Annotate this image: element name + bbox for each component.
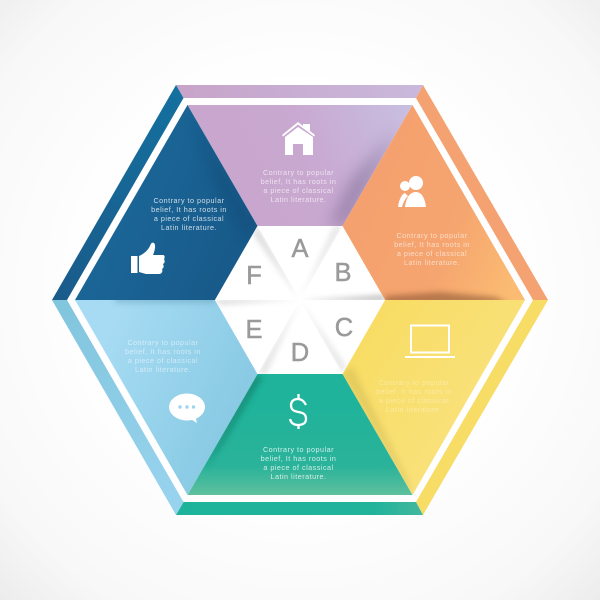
- text: panel E: Latin literature.: [135, 365, 191, 374]
- text: panel B: [394, 231, 470, 267]
- text: panel E: Contrary to popular: [127, 338, 199, 347]
- text: panel D: Latin literature.: [270, 472, 327, 481]
- icon: laptop: [405, 326, 455, 357]
- text: panel E: a piece of classical: [128, 356, 198, 365]
- panel B: orange: [342, 105, 525, 304]
- text: panel A: [261, 168, 336, 204]
- outer band: dark blue: [52, 85, 184, 300]
- panel F: dark blue: [75, 105, 258, 300]
- text: panel E: belief, It has roots in: [125, 347, 201, 356]
- letter C: C: [335, 314, 353, 342]
- letter B: B: [334, 259, 352, 287]
- text: panel C: a piece of classical: [379, 396, 449, 405]
- icon: house: [282, 122, 315, 155]
- icon: speech bubble: [169, 394, 205, 423]
- text: panel F: [151, 196, 227, 232]
- outer band: yellow: [416, 300, 548, 515]
- icon: dollar: [290, 394, 306, 429]
- letter E: E: [245, 316, 263, 344]
- icon: people: [398, 176, 426, 207]
- text: panel A: a piece of classical: [263, 186, 334, 195]
- text: panel D: [261, 445, 336, 481]
- text: panel C: Contrary to popular: [378, 378, 450, 387]
- letter D: D: [291, 339, 309, 367]
- center hexagon with letters: [215, 226, 385, 374]
- text: panel F: belief, It has roots in: [151, 205, 227, 214]
- text: panel A: Contrary to popular: [263, 168, 334, 177]
- letter A: A: [291, 235, 309, 263]
- hexagon infographic: [52, 85, 548, 515]
- panel E: light blue: [75, 296, 258, 495]
- icon: thumbs up: [131, 243, 165, 274]
- text: panel C: Latin literature.: [386, 405, 442, 414]
- panel D: teal: [188, 374, 412, 495]
- text: panel C: belief, It has roots in: [376, 387, 452, 396]
- text: panel B: belief, It has roots in: [394, 240, 470, 249]
- text: panel A: Latin literature.: [270, 195, 327, 204]
- text: panel B: Contrary to popular: [396, 231, 468, 240]
- text: panel B: Latin literature.: [404, 258, 460, 267]
- text: panel A: belief, It has roots in: [261, 177, 336, 186]
- text: panel D: a piece of classical: [263, 463, 334, 472]
- outer band: teal: [176, 502, 423, 515]
- letter F: F: [246, 262, 262, 290]
- outer band: light blue: [52, 300, 184, 515]
- text: panel D: Contrary to popular: [263, 445, 334, 454]
- panel A: purple: [188, 105, 412, 226]
- text: panel D: belief, It has roots in: [261, 454, 336, 463]
- outer band: purple: [176, 85, 423, 98]
- panel C: yellow: [342, 300, 525, 495]
- text: panel C: [376, 378, 452, 414]
- text: panel F: Contrary to popular: [153, 196, 225, 205]
- outer band: orange: [416, 85, 548, 300]
- text: panel B: a piece of classical: [397, 249, 467, 258]
- text: panel E: [125, 338, 201, 374]
- text: panel F: a piece of classical: [154, 214, 224, 223]
- text: panel F: Latin literature.: [161, 223, 217, 232]
